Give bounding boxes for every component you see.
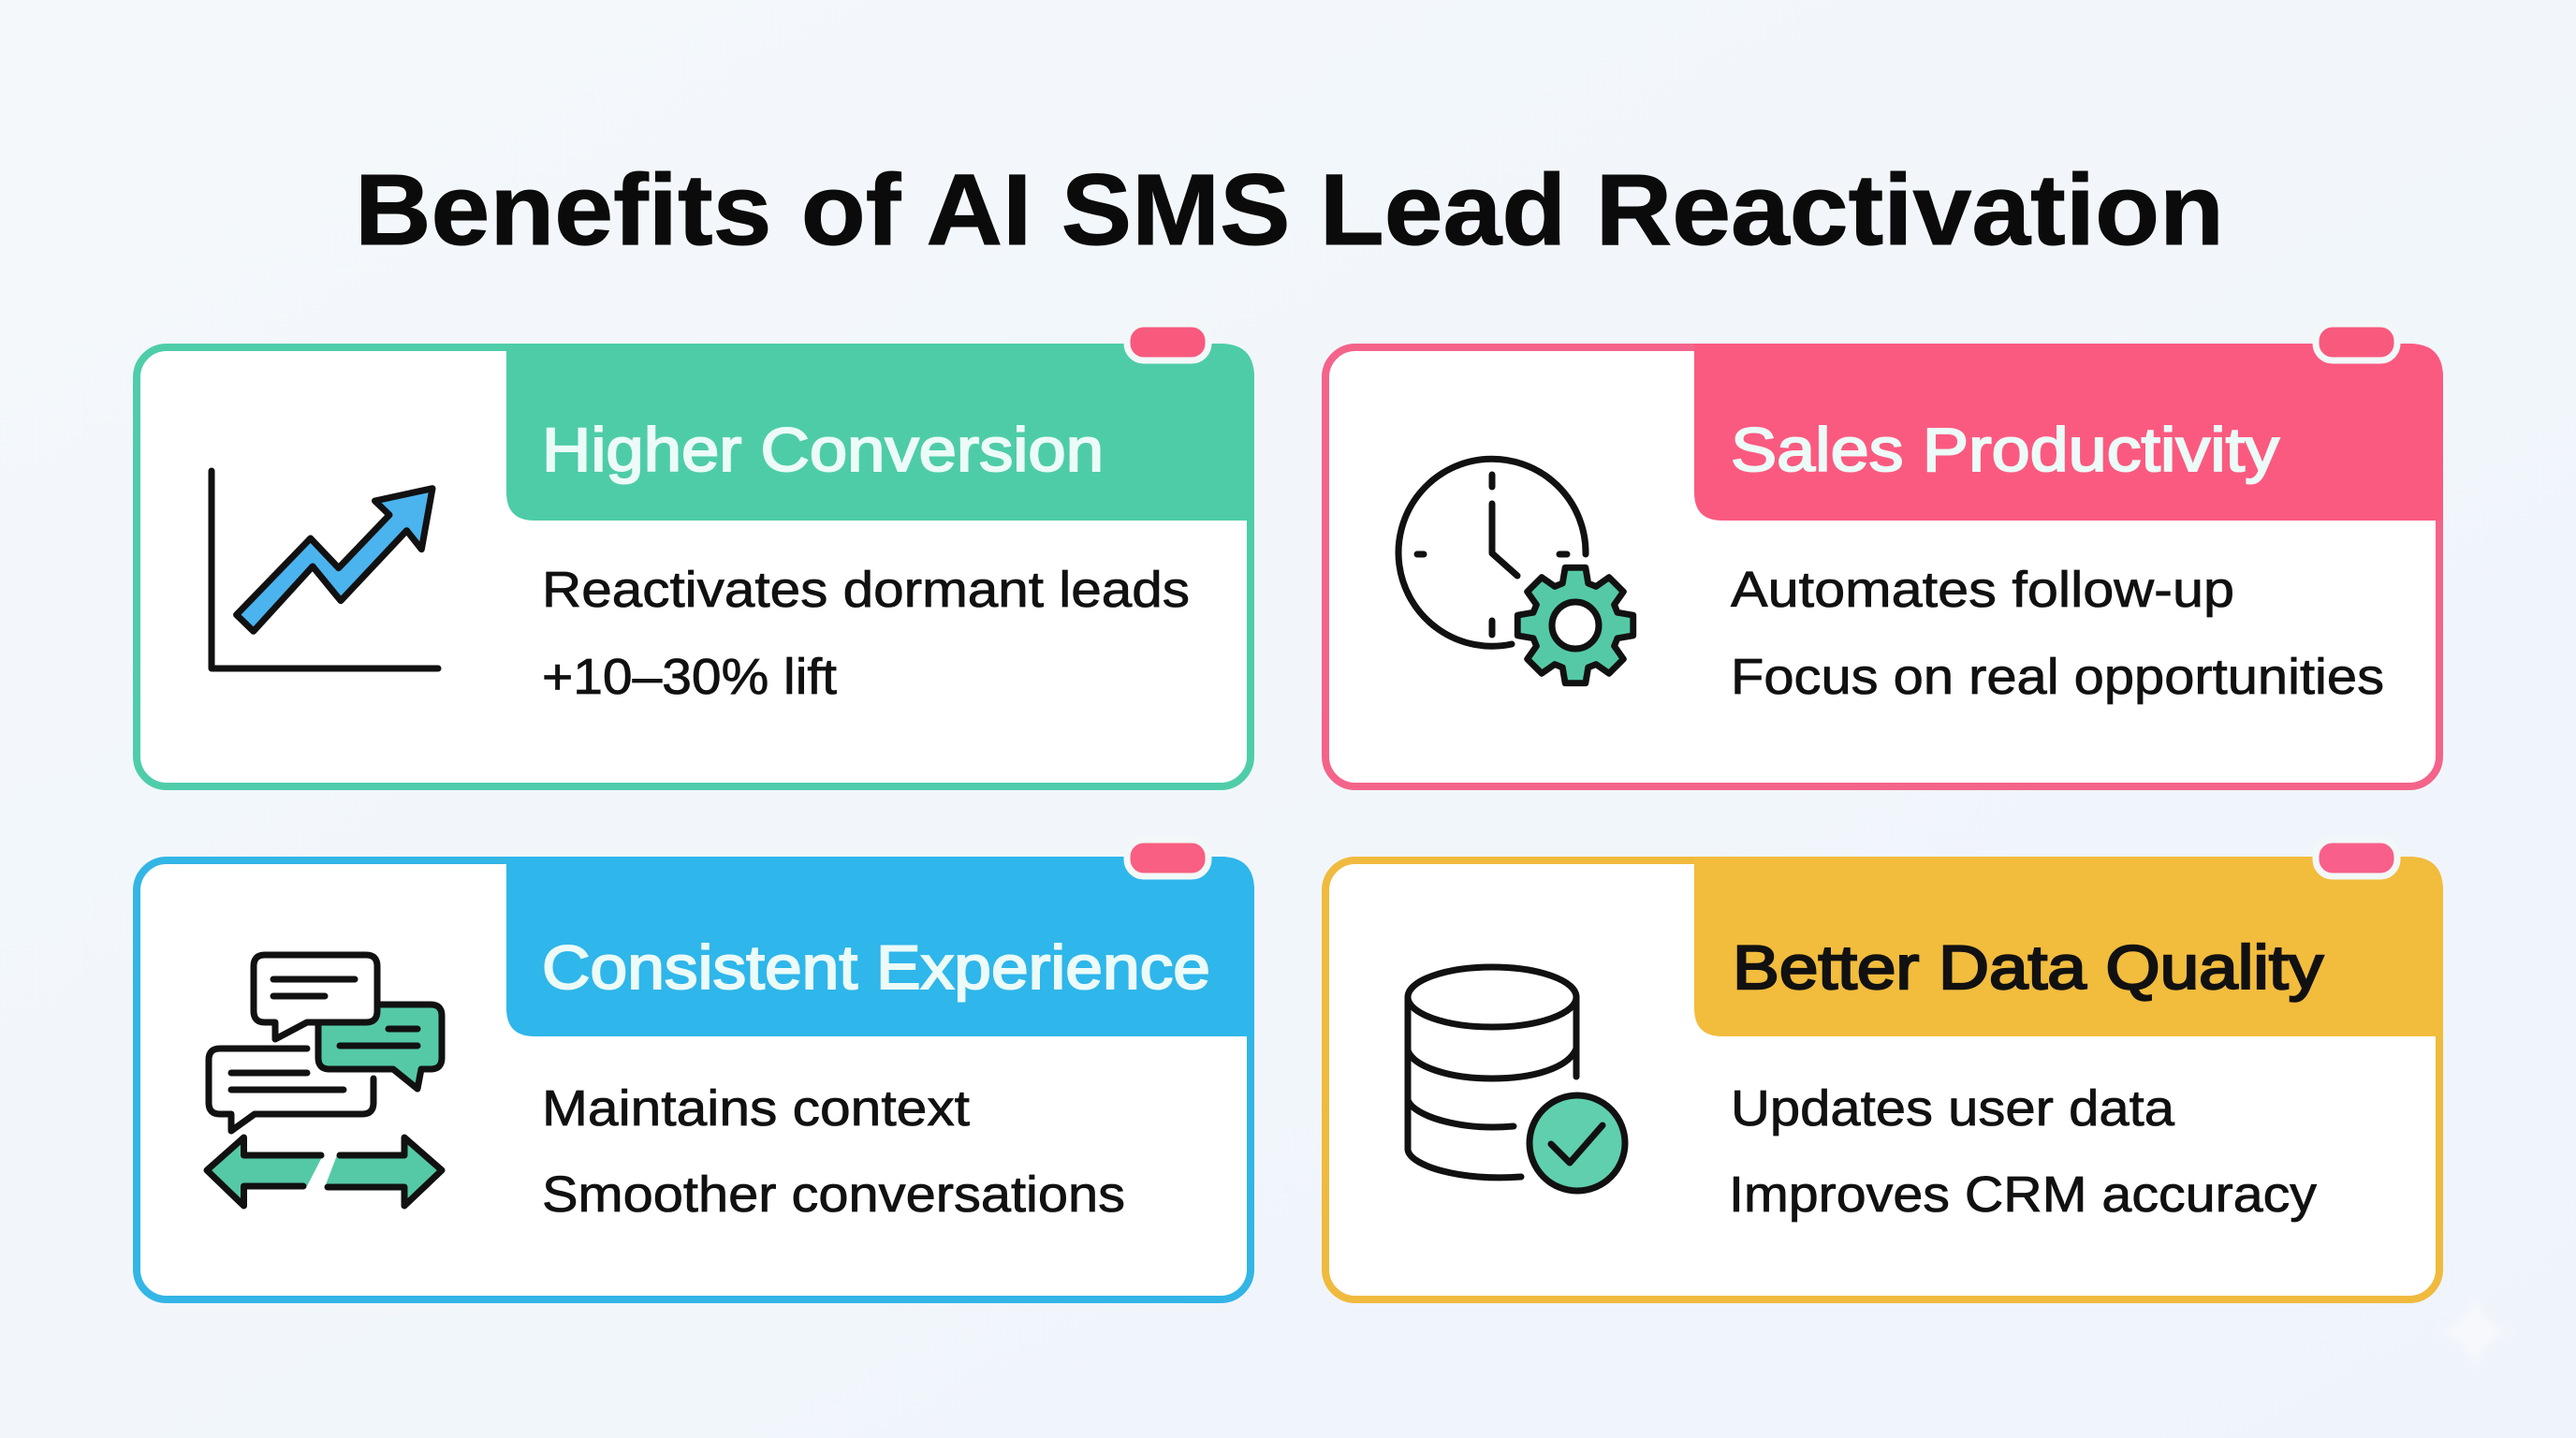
body text: Focus on real opportunities bbox=[1731, 649, 2384, 705]
tab bbox=[2316, 840, 2397, 876]
card frame bbox=[137, 860, 1251, 1299]
decorative sparkle watermark bbox=[2434, 1289, 2515, 1373]
icon: growth chart bbox=[212, 471, 438, 668]
tab bbox=[2316, 324, 2397, 360]
header band bbox=[506, 857, 1254, 1036]
body text: Smoother conversations bbox=[542, 1167, 1125, 1223]
header band bbox=[1694, 857, 2443, 1036]
body text bbox=[542, 1080, 1125, 1223]
heading: Higher Conversion bbox=[542, 415, 1104, 484]
header band bbox=[1694, 344, 2443, 521]
body text bbox=[1731, 562, 2384, 705]
heading: Better Data Quality bbox=[1733, 932, 2323, 1002]
icon: chat bubbles and arrows bbox=[207, 955, 442, 1206]
card frame bbox=[1325, 860, 2439, 1299]
body text: Updates user data bbox=[1731, 1080, 2175, 1137]
icon: clock and gear bbox=[1398, 459, 1633, 683]
body text bbox=[1729, 1080, 2317, 1223]
title: Benefits of AI SMS Lead Reactivation bbox=[355, 153, 2224, 266]
panel: Sales Productivity bbox=[1325, 324, 2443, 786]
tab bbox=[1127, 324, 1208, 360]
tab bbox=[1127, 840, 1208, 876]
heading: Sales Productivity bbox=[1731, 415, 2279, 484]
body text: Maintains context bbox=[542, 1080, 970, 1137]
body text: Improves CRM accuracy bbox=[1729, 1167, 2317, 1223]
header band bbox=[506, 344, 1254, 521]
panel: Higher Conversion bbox=[137, 324, 1254, 786]
body text: Reactivates dormant leads bbox=[542, 562, 1190, 618]
body text: Automates follow-up bbox=[1731, 562, 2234, 618]
card frame bbox=[137, 347, 1251, 786]
panel: Consistent Experience bbox=[137, 840, 1254, 1299]
body text: +10–30% lift bbox=[542, 649, 837, 705]
heading: Consistent Experience bbox=[542, 932, 1210, 1002]
panel: Better Data Quality bbox=[1325, 840, 2443, 1299]
body text bbox=[542, 562, 1190, 705]
card frame bbox=[1325, 347, 2439, 786]
icon: database with check bbox=[1408, 967, 1625, 1191]
